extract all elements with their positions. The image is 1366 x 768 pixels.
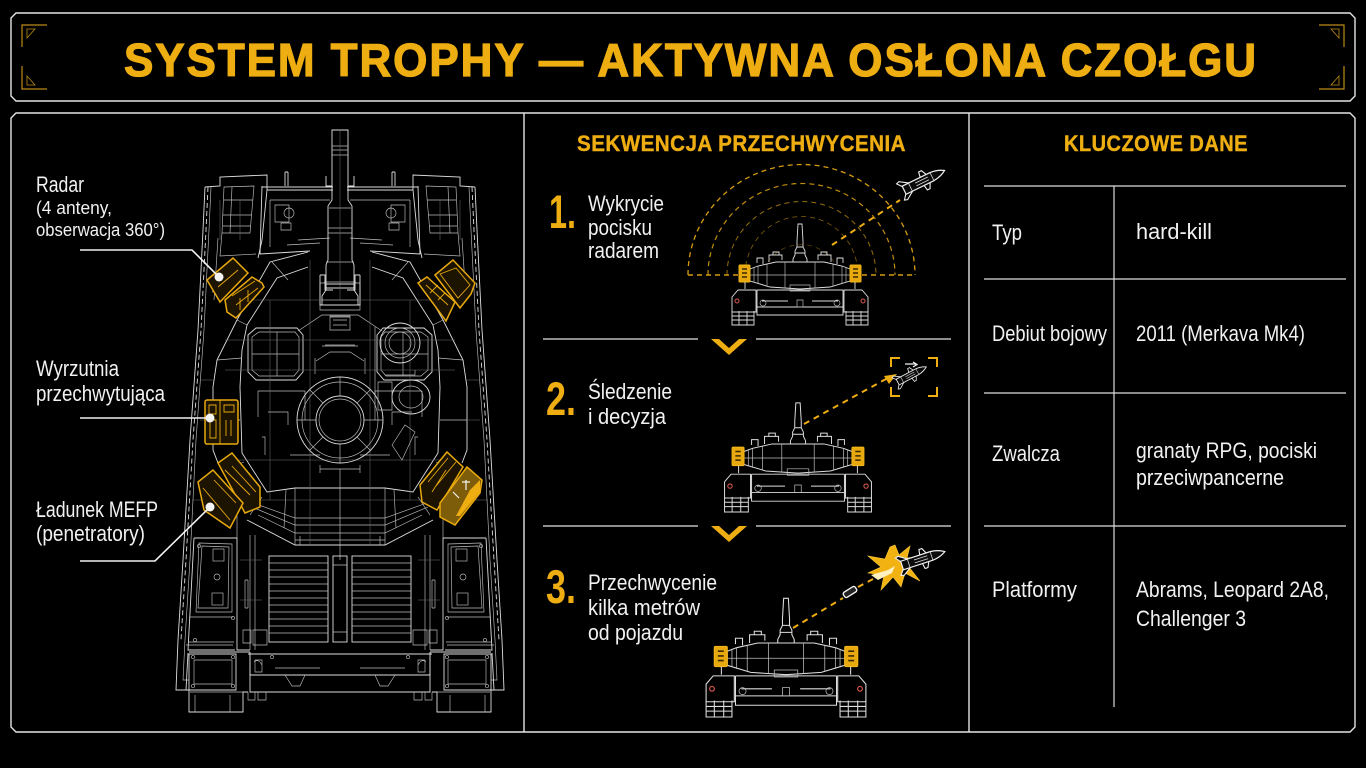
- icon: radar module top right: [418, 260, 475, 321]
- callout: radar: [36, 172, 224, 282]
- panel: interception sequence: [543, 131, 951, 717]
- heading: key data: KLUCZOWE DANE: [1064, 131, 1248, 156]
- row: combat debut: 2011 (Merkava Mk4): [1136, 321, 1305, 346]
- row: counters: Zwalcza: [992, 441, 1061, 466]
- callout: MEFP charge: Ładunek MEFP: [36, 497, 158, 522]
- icon: MEFP module bottom left: [198, 453, 260, 528]
- title: SYSTEM TROPHY — AKTYWNA OSŁONA CZOŁGU: [124, 34, 1258, 86]
- icon: explosion: [868, 545, 922, 590]
- row: platforms: Abrams, Leopard 2A8,: [1136, 577, 1329, 602]
- row: type: hard-kill: [1136, 219, 1212, 244]
- step 2: [546, 358, 937, 512]
- callout: launcher: [36, 356, 214, 422]
- table grid: [984, 186, 1346, 707]
- step 1: radarem: [588, 238, 659, 263]
- icon: launcher module left: [205, 400, 238, 444]
- tracking line: [804, 379, 886, 424]
- step 3: 3.: [546, 560, 576, 613]
- callout: launcher: Wyrzutnia: [36, 356, 120, 381]
- panel: tank top view: [36, 130, 504, 712]
- row: platforms: Platformy: [992, 577, 1077, 602]
- corner brackets: [22, 25, 1344, 89]
- callout: MEFP charge: [36, 497, 214, 561]
- step 2: i decyzja: [588, 404, 667, 429]
- divider with chevron 1: [543, 339, 951, 355]
- step 1: pocisku: [588, 215, 652, 240]
- icon: interceptor projectile: [842, 586, 858, 598]
- icon: radar module top left: [207, 258, 264, 318]
- row: platforms: Challenger 3: [1136, 606, 1246, 631]
- radar arcs: [688, 165, 915, 275]
- step 1: 1.: [549, 185, 576, 238]
- icon: missile: [896, 161, 949, 201]
- callout: radar: Radar: [36, 172, 84, 197]
- row: platforms: [992, 577, 1329, 631]
- step 2: 2.: [546, 372, 576, 425]
- step 1: Wykrycie: [588, 191, 664, 216]
- tank front view 3: [706, 598, 866, 717]
- icon: hit missile: [895, 542, 948, 576]
- tracking brackets: [891, 358, 937, 396]
- row: type: [992, 219, 1212, 245]
- icon: MEFP module bottom right: [420, 452, 482, 525]
- tank front view 2: [725, 403, 871, 512]
- tank top-view wireframe: [176, 130, 504, 712]
- step 3: kilka metrów: [588, 595, 700, 620]
- step 2: Śledzenie: [588, 379, 672, 404]
- row: counters: granaty RPG, pociski: [1136, 438, 1317, 463]
- step 1: [549, 161, 949, 325]
- callout: launcher: przechwytująca: [36, 381, 166, 406]
- title banner: [11, 13, 1355, 101]
- row: type: Typ: [992, 220, 1022, 245]
- step 3: od pojazdu: [588, 620, 683, 645]
- row: combat debut: Debiut bojowy: [992, 321, 1107, 346]
- divider with chevron 2: [543, 526, 951, 542]
- main panel frame: [11, 113, 1355, 732]
- heading: sequence: SEKWENCJA PRZECHWYCENIA: [577, 131, 906, 156]
- row: counters: przeciwpancerne: [1136, 465, 1284, 490]
- callout: radar: (4 anteny,: [36, 198, 112, 218]
- panel: key data: [984, 131, 1346, 707]
- icon: tracked missile: [892, 361, 930, 390]
- step 3: Przechwycenie: [588, 570, 717, 595]
- step 3: [546, 542, 948, 717]
- detection beam: [832, 200, 900, 245]
- tank front view 1: [732, 224, 868, 325]
- callout: radar: obserwacja 360°): [36, 220, 165, 240]
- callout: MEFP charge: (penetratory): [36, 521, 145, 546]
- row: counters: [992, 438, 1317, 490]
- interceptor trajectory: [793, 578, 875, 628]
- row: combat debut: [992, 321, 1305, 346]
